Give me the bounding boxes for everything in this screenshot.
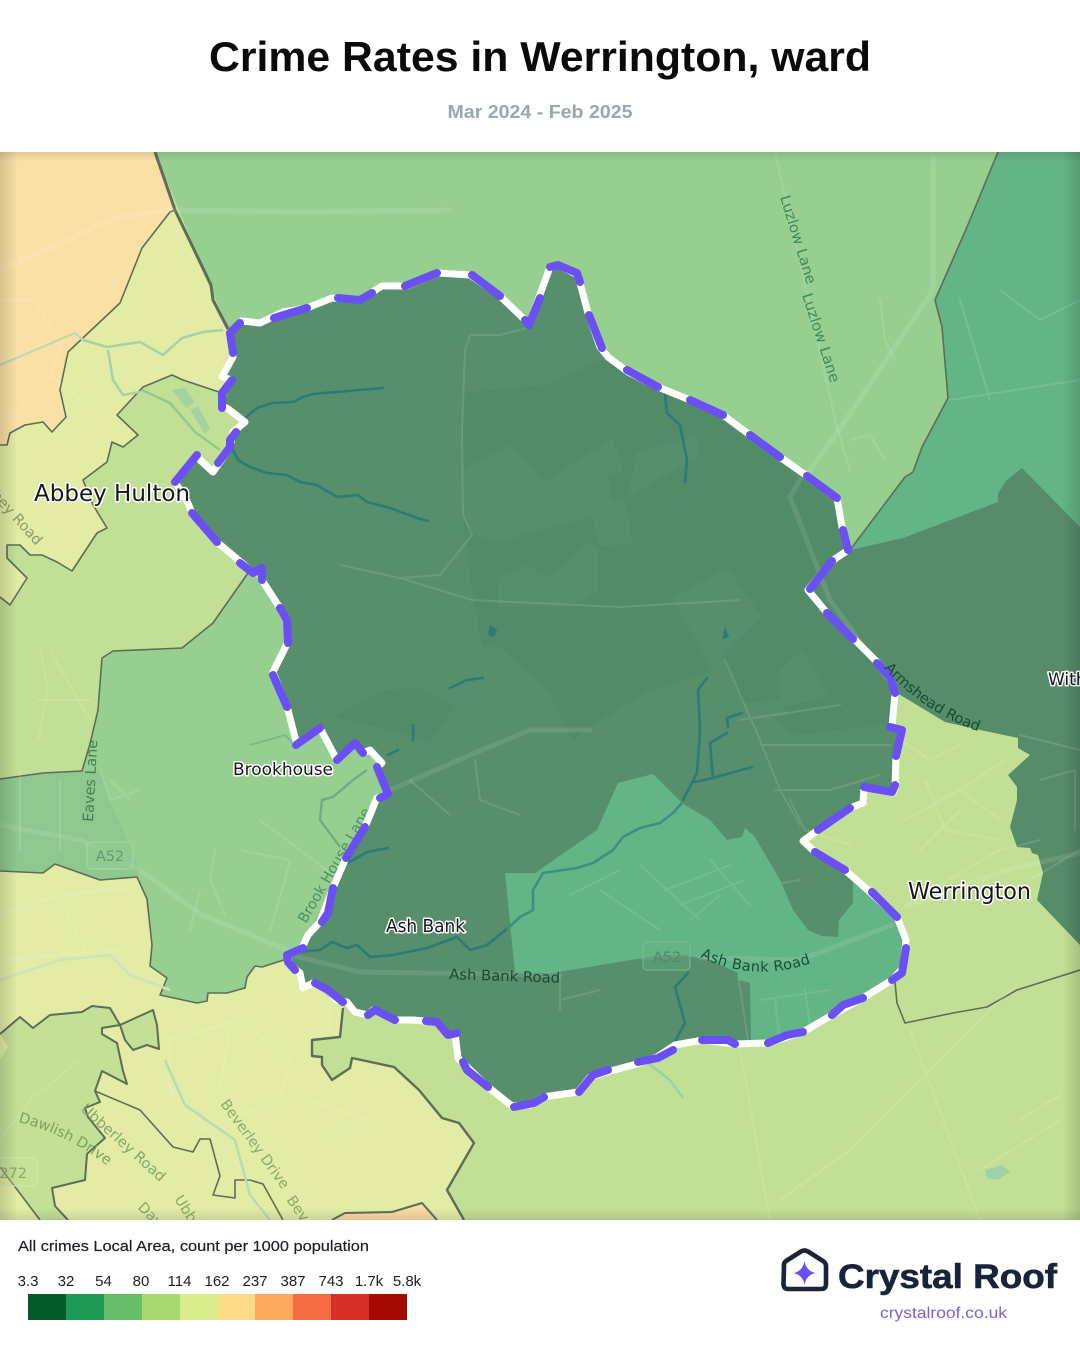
website: crystalroof.co.uk bbox=[880, 1305, 1008, 1322]
road labels: Dawlish Drive bbox=[134, 1200, 216, 1282]
legend scale labels: 54 bbox=[95, 1273, 112, 1290]
legend colour swatches bbox=[28, 1294, 407, 1320]
road shield: A5272 bbox=[0, 1158, 37, 1186]
region outlines bbox=[0, 152, 1080, 1220]
ward fill bbox=[175, 265, 906, 1106]
legend scale labels: 3.3 bbox=[18, 1273, 38, 1290]
ward roads bbox=[290, 328, 895, 1040]
road labels: Ubberley Road bbox=[77, 1101, 168, 1185]
region: base light green bbox=[0, 152, 1080, 1220]
road shield: A52 west: A52 bbox=[96, 849, 124, 865]
region: west green bbox=[83, 574, 383, 1002]
road labels: Ash Bank Road bbox=[449, 967, 560, 987]
region: west built-up tint bbox=[0, 770, 140, 880]
region: pale south-west bbox=[0, 864, 474, 1220]
road labels bbox=[0, 196, 980, 1272]
road labels: Beverley Drive bbox=[217, 1097, 292, 1192]
region: north-east green bbox=[850, 152, 1080, 560]
south-east area streets and stream bbox=[508, 803, 892, 1040]
title: Crime Rates in Werrington, ward bbox=[209, 33, 871, 80]
place label: Abbey Hulton: Abbey Hulton bbox=[34, 481, 190, 507]
legend scale labels: 237 bbox=[242, 1273, 268, 1290]
road label: Brook House Lane: Brook House Lane bbox=[296, 805, 375, 926]
road shield: A52 ward bbox=[643, 942, 690, 970]
road labels: Beverley Drive bbox=[283, 1193, 357, 1290]
place label: Werrington: Werrington bbox=[908, 879, 1031, 905]
legend scale labels: 387 bbox=[280, 1273, 306, 1290]
map edge vignette bbox=[0, 152, 1080, 1220]
road labels: Luzlow Lane bbox=[776, 193, 818, 286]
legend scale labels bbox=[18, 1273, 422, 1290]
wordmark: Crystal Roof bbox=[838, 1258, 1058, 1296]
legend bbox=[18, 1238, 422, 1320]
road labels: Eaves Lane bbox=[81, 739, 101, 822]
ward boundary: white line bbox=[175, 265, 906, 1106]
road shield: A52 ward: A52 bbox=[653, 950, 681, 966]
road shield: A52 west bbox=[87, 842, 133, 869]
legend scale labels: 162 bbox=[204, 1273, 230, 1290]
legend title: All crimes Local Area, count per 1000 population bbox=[18, 1238, 369, 1255]
place label: Brookhouse: Brookhouse bbox=[233, 760, 333, 780]
road labels: Luzlow Lane bbox=[798, 291, 842, 385]
region: south-west green patch bbox=[0, 1006, 127, 1220]
legend scale labels: 743 bbox=[318, 1273, 344, 1290]
subtitle: date range: Mar 2024 - Feb 2025 bbox=[448, 101, 632, 122]
road labels: Dawlish Drive bbox=[20, 1112, 110, 1165]
region: pale Abbey Hulton bbox=[0, 210, 230, 605]
ward streams bbox=[233, 388, 752, 1045]
legend scale labels: 114 bbox=[168, 1273, 191, 1290]
ward woodland bbox=[333, 360, 893, 742]
icon: house with star bbox=[784, 1250, 826, 1289]
region: north green bbox=[155, 152, 998, 550]
road labels: Armshead Road bbox=[884, 664, 980, 731]
region: dark east (Withington) bbox=[808, 468, 1080, 945]
region: small green patch bbox=[121, 1012, 158, 1048]
region: peach south bbox=[332, 1203, 437, 1220]
logo: Crystal Roof bbox=[784, 1250, 1058, 1322]
ward boundary: purple dashes bbox=[175, 265, 906, 1107]
road labels: Ash Bank Road bbox=[700, 949, 810, 972]
legend scale labels: 32 bbox=[58, 1273, 74, 1290]
road labels: Ubberley Road bbox=[171, 1193, 241, 1291]
place label: Ash Bank: Ash Bank bbox=[386, 916, 466, 937]
ward low-crime area: south-east bbox=[505, 774, 906, 1043]
pale streams outside ward bbox=[0, 330, 1010, 1220]
roads outside ward bbox=[0, 152, 1080, 1220]
legend scale labels: 5.8k bbox=[393, 1273, 422, 1290]
legend scale labels: 1.7k bbox=[355, 1273, 384, 1290]
region: orange north-west bbox=[0, 152, 175, 445]
legend scale labels: 80 bbox=[133, 1273, 149, 1290]
